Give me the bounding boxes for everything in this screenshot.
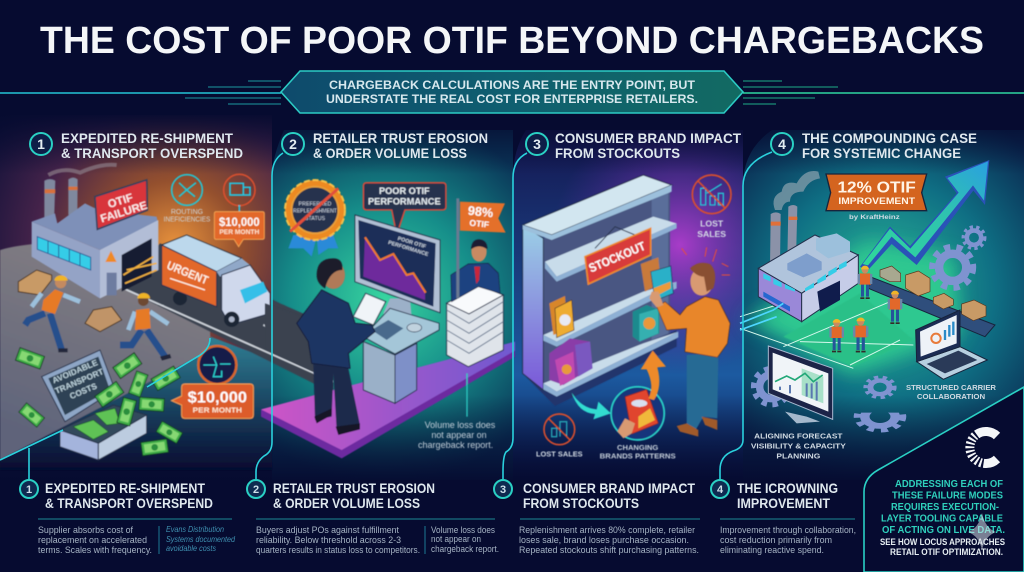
- sign: OTIF failure: [95, 180, 149, 229]
- header 2: & ORDER VOLUME LOSS: [313, 145, 467, 161]
- footer column 1: Supplier absorbs cost of: [38, 525, 133, 536]
- connector lines: [0, 152, 772, 479]
- label: routing inefficiencies: [164, 209, 211, 223]
- footer column 3: CONSUMER BRAND IMPACT: [523, 481, 696, 496]
- forecast monitor: [768, 346, 833, 423]
- footer column 3: FROM STOCKOUTS: [523, 496, 639, 511]
- footer column 2: RETAILER TRUST EROSION: [273, 481, 435, 496]
- cartons: [880, 266, 986, 321]
- footer column 1: 1: [26, 484, 32, 496]
- footer column 2: reliability. Below threshold across 2-3: [256, 535, 401, 546]
- label: changing brands patterns: [600, 443, 676, 461]
- ground area: [0, 243, 211, 460]
- header 4: FOR SYSTEMIC CHANGE: [802, 145, 961, 161]
- header 2: 2: [289, 136, 297, 152]
- icon: lost sales bottom: [544, 414, 575, 445]
- panel 2 background: [272, 130, 513, 480]
- worker running right: [120, 293, 171, 361]
- footer column 3: loses sale, brand loses purchase occasion.: [519, 535, 689, 546]
- flag: 98% OTIF: [460, 202, 506, 233]
- sparkle: [968, 513, 996, 550]
- monitor with falling chart: POOR OTIF: [397, 236, 427, 250]
- green floor: [783, 293, 913, 367]
- monitor with falling chart: [355, 215, 440, 323]
- header 4: [771, 130, 977, 161]
- money box: [42, 350, 147, 460]
- man with report: [297, 258, 386, 435]
- cta text teal: THESE FAILURE MODES: [892, 490, 1003, 502]
- footer column 2: quarters results in status loss to competitors.: [256, 545, 420, 556]
- label: routing inefficiencies: ROUTING: [171, 209, 203, 216]
- bottom fade: [0, 395, 1024, 485]
- badge: preferred replenishment status: PREFERRED: [299, 202, 332, 208]
- note: volume loss: chargeback report.: [418, 440, 493, 450]
- footer column 1: avoidable costs: [166, 543, 217, 553]
- cta text white: SEE HOW LOCUS APPROACHES: [880, 537, 1005, 547]
- callout: lower 10,000 per month: [172, 384, 253, 418]
- smoke: [773, 171, 820, 210]
- label: aligning forecast: PLANNING: [776, 452, 820, 461]
- footer column 2: Buyers adjust POs against fulfillment: [256, 525, 399, 536]
- growth arrow: [860, 160, 989, 272]
- panel 1 background: [0, 115, 272, 480]
- sign: OTIF failure: FAILURE: [99, 200, 149, 225]
- cta text teal: OF ACTING ON LIVE DATA.: [882, 524, 1005, 536]
- worker running left: [25, 275, 80, 352]
- footer column 4: THE ICROWNING: [737, 481, 838, 496]
- truck: URGENT: [165, 258, 211, 288]
- footer column 2: & ORDER VOLUME LOSS: [273, 496, 420, 511]
- paper stack: [447, 285, 503, 367]
- factory: [32, 165, 158, 298]
- icon: hand with changing brand: [611, 387, 664, 440]
- laptop: [916, 310, 987, 379]
- banner: intro statement: CHARGEBACK CALCULATIONS ARE THE ENTRY POINT, BUT: [329, 78, 696, 92]
- label: structured carrier collaboration: [906, 383, 996, 401]
- cta text teal: [881, 478, 1005, 536]
- title: THE COST OF POOR OTIF BEYOND CHARGEBACKS: [40, 20, 984, 62]
- header 3: FROM STOCKOUTS: [555, 145, 680, 161]
- footer column 4: Improvement through collaboration,: [720, 525, 856, 536]
- sign: stockout: [585, 227, 651, 284]
- road markings: [123, 288, 333, 382]
- footer column 1: & TRANSPORT OVERSPEND: [45, 496, 213, 511]
- top fade: [0, 112, 1024, 174]
- header 2: [282, 130, 488, 161]
- road: [123, 243, 333, 393]
- header 1: 1: [37, 136, 45, 152]
- callout: upper 10,000 per month: $10,000: [219, 215, 260, 229]
- half gear: [854, 412, 906, 432]
- flying banknotes: [16, 348, 182, 456]
- note: volume loss: Volume loss does: [425, 420, 496, 430]
- footer column 3: 3: [500, 484, 506, 496]
- callout: poor OTIF performance: [363, 183, 446, 235]
- arrow: teal: [572, 393, 611, 419]
- label: aligning forecast: VISIBILITY & CAPACITY: [751, 442, 846, 451]
- label: aligning forecast: ALIGNING FORECAST: [754, 432, 843, 441]
- cta text teal: LAYER TOOLING CAPABLE: [881, 512, 1003, 524]
- panel 4 background: [743, 130, 1024, 480]
- shelf unit: [523, 175, 678, 406]
- callout: lower 10,000 per month: $10,000: [188, 390, 247, 407]
- callout: poor OTIF performance: POOR OTIF: [379, 186, 430, 196]
- desk: [363, 308, 439, 403]
- flag holder: [451, 198, 500, 302]
- conveyor: [868, 277, 995, 337]
- footer column 3: [494, 480, 700, 556]
- badge: preferred replenishment status: STATUS: [305, 216, 326, 222]
- flag: 98% OTIF: OTIF: [469, 218, 490, 230]
- footer column 1: Systems documented: [166, 534, 235, 544]
- badge: preferred replenishment status: [285, 180, 345, 257]
- header 1: [30, 130, 243, 161]
- header 3: CONSUMER BRAND IMPACT: [555, 130, 741, 146]
- monitor with falling chart: PERFORMANCE: [387, 240, 429, 258]
- footer column 1: EXPEDITED RE-SHIPMENT: [45, 481, 206, 496]
- callout: lower 10,000 per month: PER MONTH: [193, 406, 243, 415]
- note: volume loss: [418, 420, 496, 450]
- label: structured carrier collaboration: STRUCTURED CARRIER: [906, 383, 996, 392]
- badge: preferred replenishment status: REPLENISHMENT: [293, 209, 338, 215]
- green floor glow: [747, 243, 960, 373]
- footer column 2: 2: [253, 484, 259, 496]
- panel 3 background: [513, 130, 743, 480]
- label: lost sales bottom: LOST SALES: [536, 450, 583, 459]
- label: changing brands patterns: CHANGING: [617, 443, 659, 452]
- callout: upper 10,000 per month: PER MONTH: [219, 229, 260, 236]
- panel 2 illustration: [261, 180, 515, 458]
- header 1: EXPEDITED RE-SHIPMENT: [61, 130, 233, 146]
- footer column 1: Evans Distribution: [166, 524, 224, 534]
- label: lost sales top: SALES: [697, 229, 726, 239]
- lower teal zone: [0, 337, 272, 470]
- light streams: [740, 303, 783, 330]
- products on shelves: [549, 257, 673, 386]
- footer column 2: not appear on: [431, 534, 481, 544]
- truck: [162, 235, 270, 327]
- header 2: RETAILER TRUST EROSION: [313, 130, 488, 146]
- footer column 4: eliminating reactive spend.: [720, 545, 824, 556]
- label: changing brands patterns: BRANDS PATTERNS: [600, 452, 676, 461]
- label: structured carrier collaboration: COLLABORATION: [917, 392, 986, 401]
- ribbon: 12% OTIF improvement: 12% OTIF: [837, 180, 916, 197]
- footer column 2: [247, 480, 499, 556]
- footer column 2: Volume loss does: [431, 525, 495, 535]
- header 4: THE COMPOUNDING CASE: [802, 130, 977, 146]
- ribbon: 12% OTIF improvement: [826, 174, 927, 211]
- footer column 4: 4: [717, 484, 724, 496]
- arrow: orange: [641, 351, 666, 400]
- header 4: 4: [778, 136, 786, 152]
- footer column 4: IMPROVEMENT: [737, 496, 831, 511]
- factory: [758, 205, 858, 322]
- gears: [754, 227, 985, 405]
- person with orange sweater: [649, 263, 730, 437]
- boxes beside factory: [18, 270, 52, 295]
- flag: 98% OTIF: 98%: [467, 204, 494, 220]
- sign: stockout: STOCKOUT: [587, 239, 648, 275]
- footer column 1: terms. Scales with frequency.: [38, 545, 152, 556]
- workers: [829, 266, 902, 352]
- note: volume loss: not appear on: [431, 430, 487, 440]
- money box: TRANSPORT: [53, 366, 105, 396]
- money box: COSTS: [68, 380, 99, 401]
- header 3: 3: [533, 136, 541, 152]
- footer column 3: Replenishment arrives 80% complete, retailer: [519, 525, 695, 536]
- road continuation: [265, 303, 313, 372]
- note stem: [465, 373, 469, 417]
- banner: intro statement: [0, 71, 1024, 113]
- callout: poor OTIF performance: PERFORMANCE: [368, 196, 441, 206]
- ribbon: 12% OTIF improvement: IMPROVEMENT: [838, 196, 915, 206]
- call-to-action panel: [864, 387, 1024, 572]
- pallet boxes: [85, 307, 122, 332]
- money box: AVOIDABLE: [51, 357, 100, 385]
- label: routing inefficiencies: INEFICIENCIES: [164, 216, 211, 223]
- header 1: & TRANSPORT OVERSPEND: [61, 145, 243, 161]
- footer column 2: chargeback report.: [431, 544, 499, 554]
- cta text white: RETAIL OTIF OPTIMIZATION.: [890, 547, 1003, 557]
- panel 4 illustration: [740, 160, 996, 461]
- panel 3 illustration: [523, 175, 731, 461]
- panel 1 illustration: [0, 165, 333, 470]
- icon: routing: [172, 175, 202, 205]
- footer column 4: cost reduction primarily from: [720, 535, 832, 546]
- icon: lost sales top: [692, 175, 731, 214]
- logo: C mark: [970, 432, 997, 463]
- footer column 4: [711, 480, 856, 556]
- label: lost sales top: [697, 219, 726, 239]
- label: aligning forecast: [751, 432, 846, 461]
- stress marks: [682, 247, 730, 275]
- footer column 1: [20, 480, 235, 556]
- icon: truck: [224, 174, 255, 212]
- footer column 1: replacement on accelerated: [38, 535, 147, 546]
- cta text teal: ADDRESSING EACH OF: [895, 478, 1004, 490]
- icon: routes disruption: [198, 346, 236, 384]
- callout: upper 10,000 per month: [214, 212, 264, 247]
- floor grid: [740, 302, 913, 368]
- byline: KraftHeinz: by KraftHeinz: [849, 214, 900, 221]
- sign: OTIF failure: OTIF: [106, 192, 135, 211]
- header 3: [526, 130, 741, 161]
- cta text white: [880, 537, 1005, 557]
- cta text teal: REQUIRES EXECUTION-: [891, 501, 999, 513]
- label: lost sales top: LOST: [700, 219, 724, 229]
- platform: [261, 342, 515, 458]
- banner: intro statement: UNDERSTATE THE REAL COST FOR ENTERPRISE RETAILERS.: [326, 92, 698, 106]
- footer column 3: Repeated stockouts shift purchasing patterns.: [519, 545, 699, 556]
